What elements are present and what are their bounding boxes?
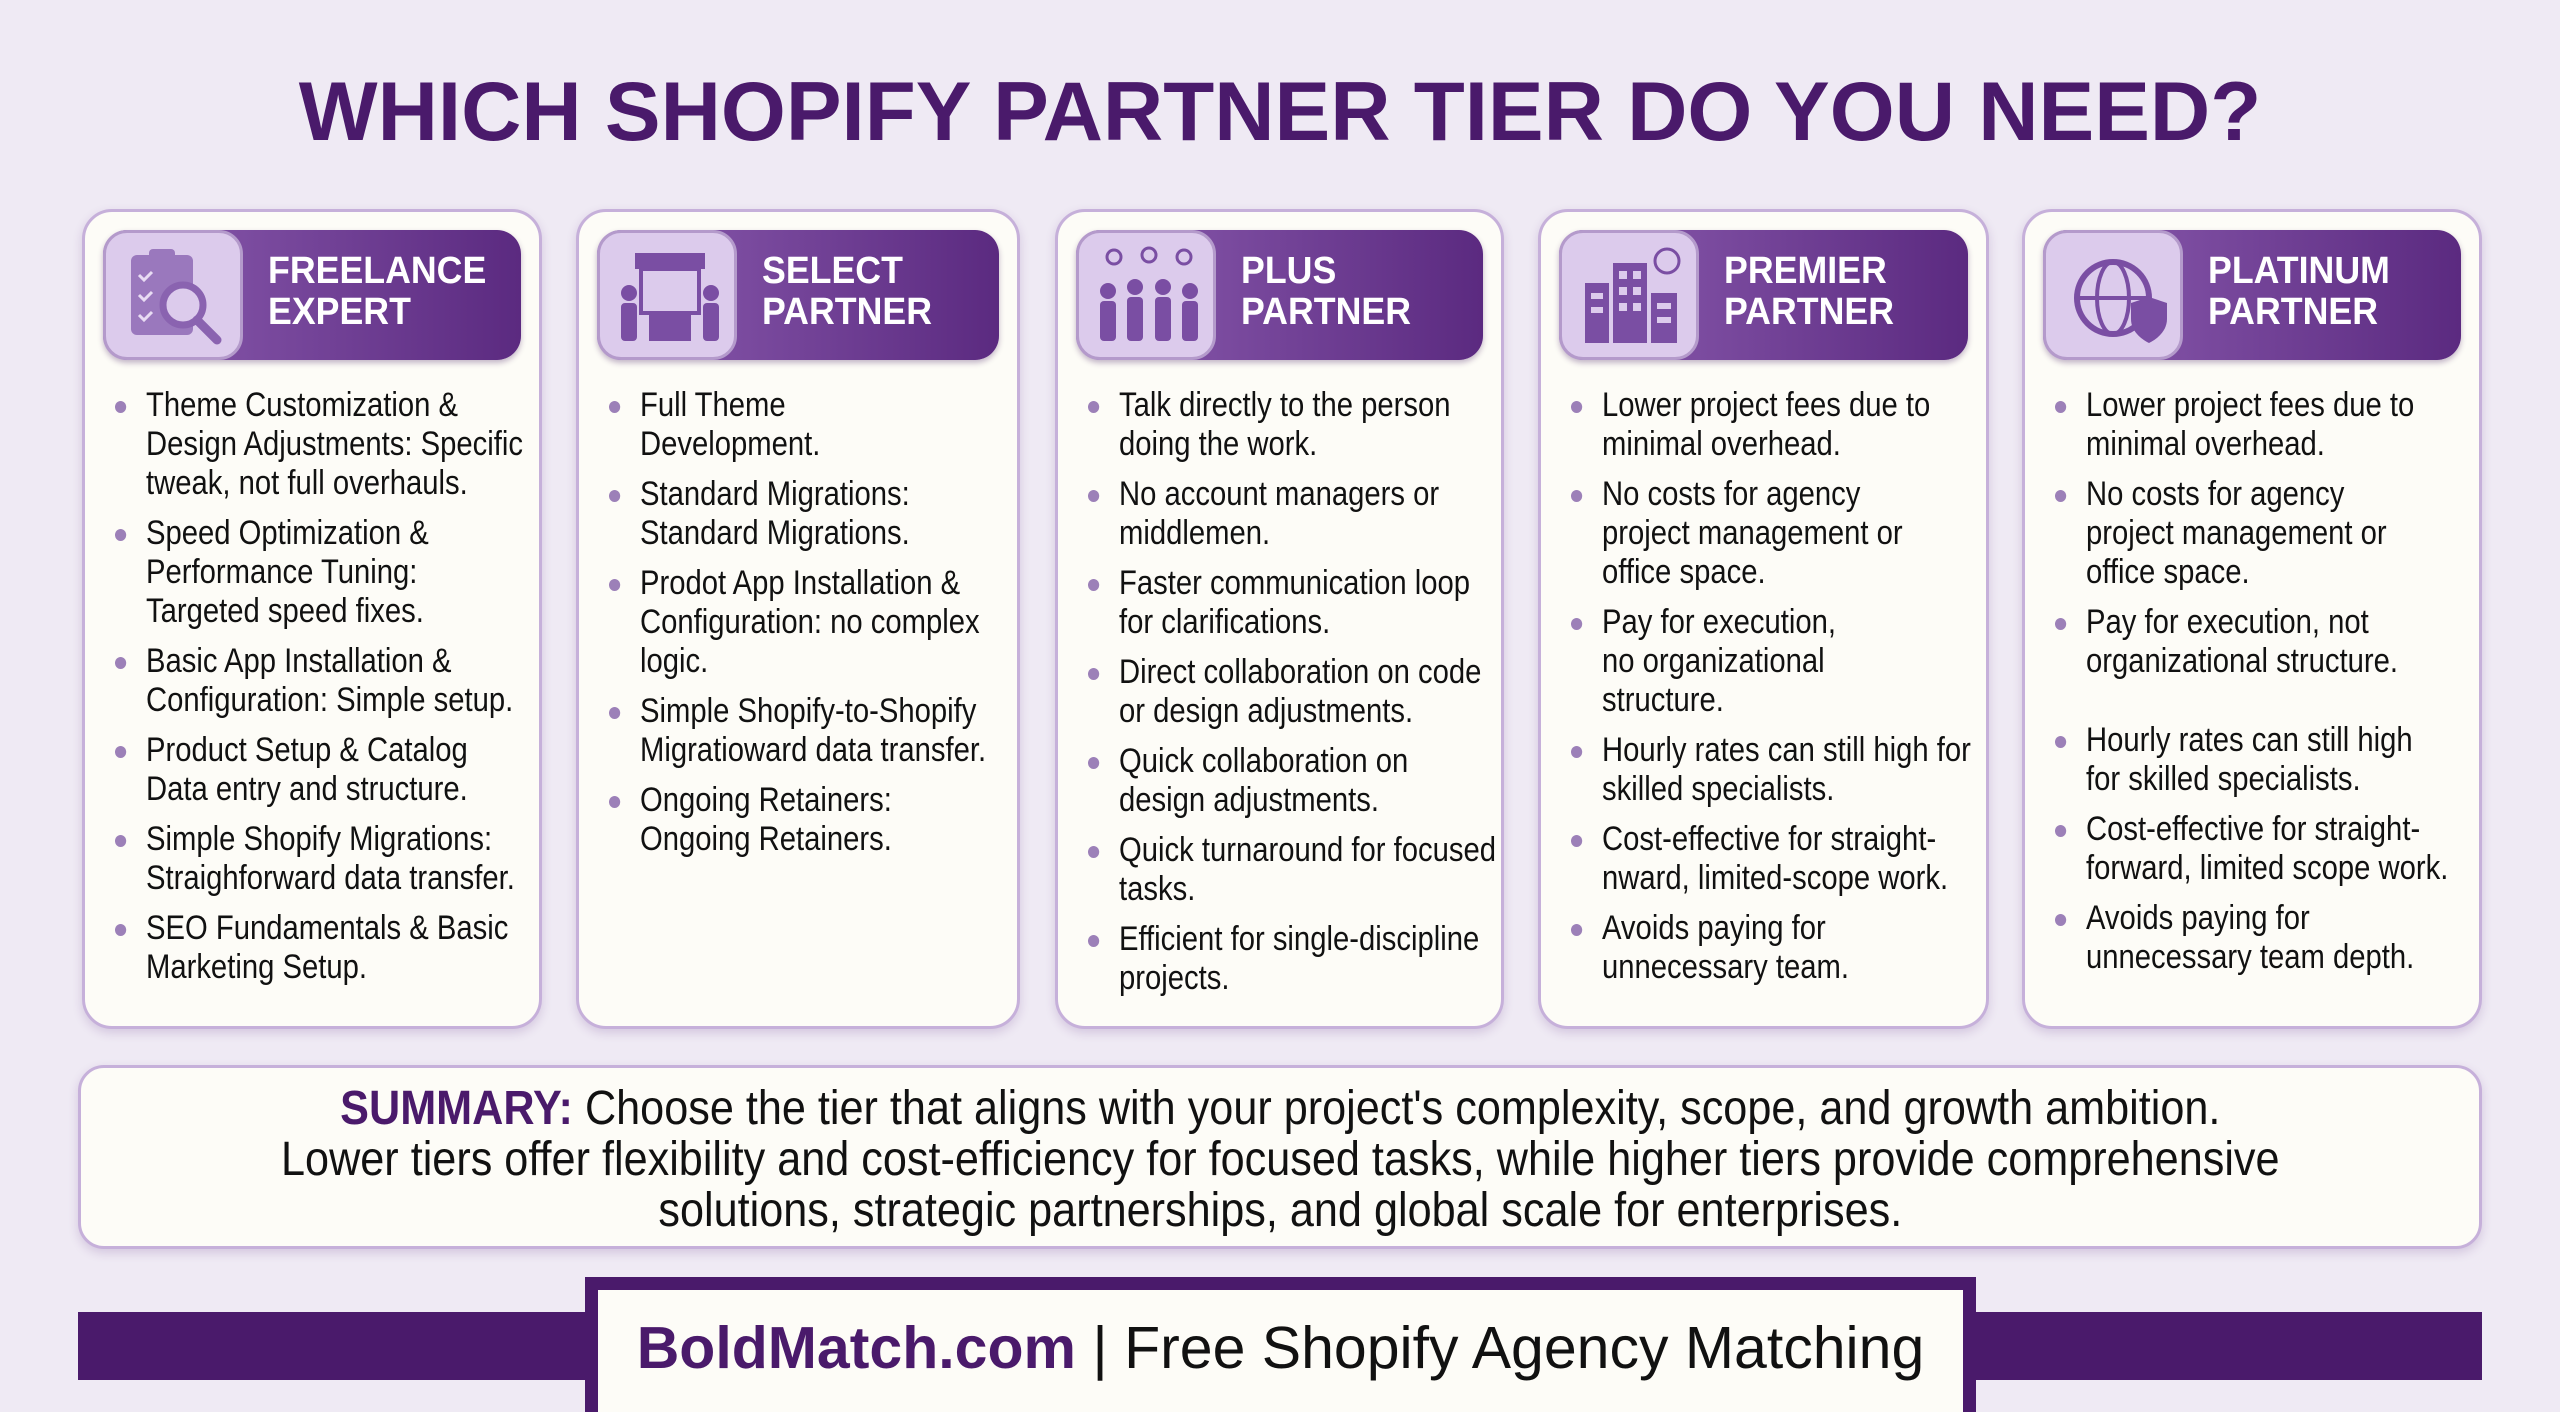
- list: plus items: design adjustments.: [1119, 781, 1379, 819]
- header: freelance expert: EXPERT: [268, 291, 411, 333]
- list: platinum items: Cost-effective for straight-: [2086, 810, 2420, 848]
- list: freelance items: Data entry and structure.: [146, 770, 468, 808]
- list: platinum items: office space.: [2086, 553, 2250, 591]
- list: plus items: for clarifications.: [1119, 603, 1330, 641]
- list: plus items: tasks.: [1119, 870, 1195, 908]
- list: freelance items: tweak, not full overhauls.: [146, 464, 468, 502]
- header: plus partner: [1076, 230, 1483, 360]
- list: select items: Development.: [640, 425, 820, 463]
- list: premier items: Hourly rates can still high for: [1602, 731, 1971, 769]
- list: select items: Standard Migrations.: [640, 514, 910, 552]
- summary box: SUMMARY: Choose the tier that aligns with your project's complexity, scope, and growth ambition.: [340, 1082, 2220, 1135]
- footer brand box: [585, 1277, 1976, 1412]
- list: select items: Full Theme: [640, 386, 786, 424]
- list: freelance items: [115, 386, 523, 986]
- list: freelance items: Simple Shopify Migrations:: [146, 820, 492, 858]
- list: premier items: Pay for execution,: [1602, 603, 1836, 641]
- list: platinum items: project management or: [2086, 514, 2387, 552]
- list: premier items: minimal overhead.: [1602, 425, 1841, 463]
- summary box: [78, 1065, 2482, 1249]
- list: select items: Ongoing Retainers.: [640, 820, 892, 858]
- header: plus partner: PLUS: [1241, 250, 1336, 292]
- list: premier items: project management or: [1602, 514, 1903, 552]
- list: premier items: Lower project fees due to: [1602, 386, 1930, 424]
- list: select items: Standard Migrations:: [640, 475, 910, 513]
- header: platinum partner: PLATINUM: [2208, 250, 2390, 292]
- list: premier items: unnecessary team.: [1602, 948, 1849, 986]
- panel: plus partner: [1055, 209, 1504, 1029]
- list: freelance items: Straighforward data transfer.: [146, 859, 515, 897]
- list: plus items: projects.: [1119, 959, 1229, 997]
- icon: buildings globe: [1559, 230, 1699, 360]
- list: freelance items: Marketing Setup.: [146, 948, 367, 986]
- header: premier partner: PARTNER: [1724, 291, 1894, 333]
- list: platinum items: minimal overhead.: [2086, 425, 2325, 463]
- header: premier partner: PREMIER: [1724, 250, 1887, 292]
- panel: freelance expert: [82, 209, 542, 1029]
- panel: premier partner: [1538, 209, 1989, 1029]
- title: WHICH SHOPIFY PARTNER TIER DO YOU NEED?: [299, 64, 2261, 158]
- list: select items: Migratioward data transfer.: [640, 731, 986, 769]
- panel: platinum partner: [2022, 209, 2482, 1029]
- list: select items: Configuration: no complex: [640, 603, 980, 641]
- list: premier items: [1571, 386, 1971, 986]
- icon: team group: [1076, 230, 1216, 360]
- icon: globe shield: [2043, 230, 2183, 360]
- list: select items: [609, 386, 986, 858]
- list: freelance items: Speed Optimization &: [146, 514, 429, 552]
- list: plus items: middlemen.: [1119, 514, 1270, 552]
- summary box: Lower tiers offer flexibility and cost-efficiency for focused tasks, while higher tiers provide comprehensive: [281, 1133, 2279, 1186]
- list: select items: Simple Shopify-to-Shopify: [640, 692, 976, 730]
- list: platinum items: Pay for execution, not: [2086, 603, 2369, 641]
- list: premier items: No costs for agency: [1602, 475, 1860, 513]
- list: plus items: Quick collaboration on: [1119, 742, 1408, 780]
- list: freelance items: Design Adjustments: Specific: [146, 425, 523, 463]
- icon: clipboard magnifier: [103, 230, 243, 360]
- header: plus partner: PARTNER: [1241, 291, 1411, 333]
- icon: storefront people: [597, 230, 737, 360]
- header: select partner: PARTNER: [762, 291, 932, 333]
- list: plus items: Quick turnaround for focused: [1119, 831, 1496, 869]
- list: select items: Ongoing Retainers:: [640, 781, 892, 819]
- header: select partner: [597, 230, 999, 360]
- list: platinum items: unnecessary team depth.: [2086, 938, 2414, 976]
- list: platinum items: organizational structure.: [2086, 642, 2398, 680]
- panel: select partner: [576, 209, 1020, 1029]
- list: premier items: Cost-effective for straight-: [1602, 820, 1936, 858]
- list: freelance items: Targeted speed fixes.: [146, 592, 424, 630]
- header: freelance expert: [103, 230, 521, 360]
- list: premier items: nward, limited-scope work.: [1602, 859, 1948, 897]
- list: plus items: Direct collaboration on code: [1119, 653, 1481, 691]
- footer bar: [78, 1312, 2482, 1380]
- list: freelance items: Configuration: Simple setup.: [146, 681, 513, 719]
- list: platinum items: No costs for agency: [2086, 475, 2344, 513]
- list: freelance items: SEO Fundamentals & Basic: [146, 909, 508, 947]
- list: platinum items: Avoids paying for: [2086, 899, 2310, 937]
- list: freelance items: Performance Tuning:: [146, 553, 417, 591]
- summary box: solutions, strategic partnerships, and global scale for enterprises.: [658, 1184, 1902, 1237]
- list: plus items: Faster communication loop: [1119, 564, 1470, 602]
- list: plus items: [1088, 386, 1496, 997]
- header: platinum partner: [2043, 230, 2461, 360]
- list: premier items: skilled specialists.: [1602, 770, 1834, 808]
- list: premier items: Avoids paying for: [1602, 909, 1826, 947]
- list: plus items: or design adjustments.: [1119, 692, 1413, 730]
- list: freelance items: Basic App Installation &: [146, 642, 452, 680]
- header: select partner: SELECT: [762, 250, 903, 292]
- list: plus items: doing the work.: [1119, 425, 1317, 463]
- list: select items: Prodot App Installation &: [640, 564, 960, 602]
- list: platinum items: [2055, 386, 2448, 976]
- list: platinum items: for skilled specialists.: [2086, 760, 2361, 798]
- header: freelance expert: FREELANCE: [268, 250, 486, 292]
- list: platinum items: Hourly rates can still high: [2086, 721, 2413, 759]
- header: platinum partner: PARTNER: [2208, 291, 2378, 333]
- footer brand box: BoldMatch.com | Free Shopify Agency Matching: [637, 1315, 1924, 1381]
- list: premier items: structure.: [1602, 681, 1724, 719]
- list: premier items: office space.: [1602, 553, 1766, 591]
- list: select items: logic.: [640, 642, 708, 680]
- list: platinum items: forward, limited scope work.: [2086, 849, 2448, 887]
- list: plus items: Talk directly to the person: [1119, 386, 1451, 424]
- header: premier partner: [1559, 230, 1968, 360]
- list: platinum items: Lower project fees due to: [2086, 386, 2414, 424]
- list: plus items: Efficient for single-discipline: [1119, 920, 1479, 958]
- list: plus items: No account managers or: [1119, 475, 1439, 513]
- list: premier items: no organizational: [1602, 642, 1825, 680]
- list: freelance items: Product Setup & Catalog: [146, 731, 468, 769]
- list: freelance items: Theme Customization &: [146, 386, 458, 424]
